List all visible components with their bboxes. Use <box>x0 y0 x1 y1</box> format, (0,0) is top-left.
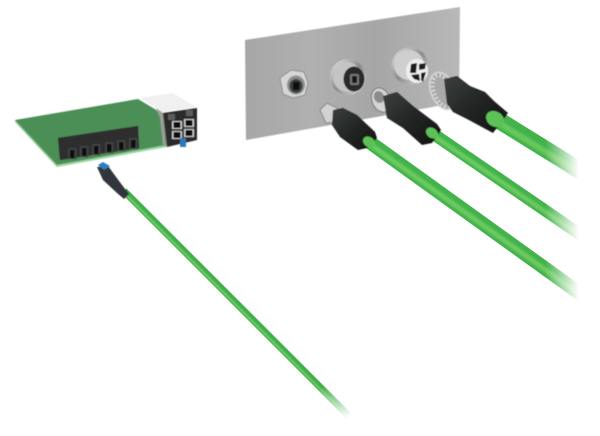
icon: hexagonal panel socket <box>280 70 308 98</box>
icon: black multi-socket block on board <box>163 108 197 147</box>
icon: small blue-tipped plug <box>97 162 129 199</box>
cable: long thin green cable <box>123 191 350 418</box>
cable: top right thick green cable <box>494 118 600 185</box>
cable end fade <box>300 365 370 435</box>
cable end fades <box>545 100 579 330</box>
icon: power panel socket <box>392 48 428 84</box>
icon: round panel socket <box>330 59 366 95</box>
icon: lower left slim connector <box>320 103 377 150</box>
panel: grey mounting plate <box>245 7 460 140</box>
icon: right large round connector <box>425 68 508 133</box>
icon: six-way black connector strip <box>58 126 139 160</box>
panel: green circuit board <box>15 99 167 167</box>
icon: middle stepped connector <box>368 85 441 145</box>
cable: lower right green cable <box>367 141 600 309</box>
cable: middle right green cable <box>431 133 600 249</box>
icon: white module housing <box>140 93 196 146</box>
